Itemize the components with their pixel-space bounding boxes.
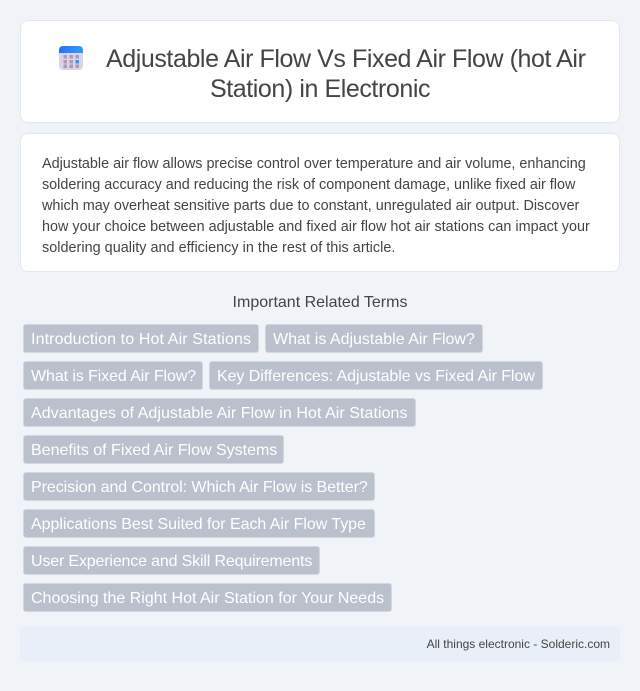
tag: What is Fixed Air Flow? — [31, 368, 196, 385]
intro text: soldering accuracy and reducing the risk of component damage, unlike fixed air flow — [42, 177, 575, 193]
tag — [23, 546, 320, 575]
tag — [23, 583, 392, 612]
tag — [23, 472, 375, 501]
tag: Precision and Control: Which Air Flow is Better? — [31, 479, 368, 496]
intro text: which may overheat sensitive parts due to constant, unregulated air output. Discover — [42, 198, 579, 214]
tag: User Experience and Skill Requirements — [31, 553, 312, 570]
tag — [23, 324, 259, 353]
panel: title card — [20, 20, 620, 123]
tag — [23, 509, 375, 538]
tag — [209, 361, 543, 390]
tag: Advantages of Adjustable Air Flow in Hot Air Stations — [31, 405, 408, 422]
intro text — [42, 156, 590, 256]
tag: Benefits of Fixed Air Flow Systems — [31, 442, 277, 459]
icon: calendar — [59, 46, 83, 70]
title — [106, 45, 586, 103]
footer bar — [20, 627, 620, 661]
heading: related terms: Important Related Terms — [233, 294, 407, 311]
tag — [23, 435, 284, 464]
title: Station) in Electronic — [210, 75, 430, 103]
panel: intro text — [20, 133, 620, 272]
tag: Choosing the Right Hot Air Station for Your Needs — [31, 590, 384, 607]
tag: What is Adjustable Air Flow? — [273, 331, 475, 348]
tag — [23, 361, 203, 390]
intro text: how your choice between adjustable and fixed air flow hot air stations can impact your — [42, 219, 590, 235]
tag — [265, 324, 483, 353]
tag: Introduction to Hot Air Stations — [31, 331, 251, 348]
title: Adjustable Air Flow Vs Fixed Air Flow (hot Air — [106, 45, 585, 73]
tag: Key Differences: Adjustable vs Fixed Air Flow — [217, 368, 535, 385]
intro text: Adjustable air flow allows precise control over temperature and air volume, enhancing — [42, 156, 586, 172]
tag — [23, 398, 416, 427]
intro text: soldering quality and efficiency in the rest of this article. — [42, 240, 395, 256]
tag list — [23, 324, 543, 612]
tag: Applications Best Suited for Each Air Flow Type — [31, 516, 366, 533]
footer text: All things electronic - Solderic.com — [427, 637, 610, 651]
